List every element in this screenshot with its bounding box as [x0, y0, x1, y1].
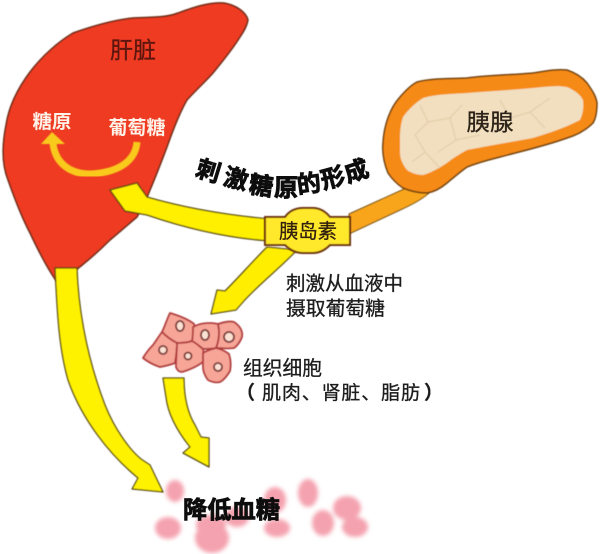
arrow: liver to lowered blood sugar	[55, 268, 163, 492]
tissue cells caption: 组织细胞	[243, 357, 322, 380]
insulin label box	[265, 208, 350, 253]
glycogen label: 糖原	[32, 110, 72, 133]
arrow: insulin to liver	[110, 183, 270, 241]
arrow: insulin to tissue cells	[211, 247, 297, 314]
curved caption: stimulate glycogen formation	[193, 155, 372, 202]
pancreas duct	[349, 186, 436, 234]
curved caption: stimulate glycogen formation: 刺	[193, 155, 224, 188]
caption: take up glucose from blood	[286, 273, 403, 320]
blood cells	[155, 479, 368, 553]
curved caption: stimulate glycogen formation: 糖	[247, 172, 275, 202]
glucose label: 葡萄糖	[108, 116, 166, 139]
result label: lower blood sugar: 降低血糖	[183, 497, 280, 524]
curved caption: stimulate glycogen formation: 形	[318, 163, 348, 195]
pancreas	[349, 70, 597, 234]
tissue cells caption: 肌肉、肾脏、脂肪	[262, 382, 420, 404]
caption: take up glucose from blood: 刺激从血液中	[286, 273, 403, 295]
tissue cells caption: （	[236, 382, 255, 404]
tissue cells	[143, 313, 242, 382]
insulin label: 胰岛素	[279, 220, 337, 243]
caption: take up glucose from blood: 摄取葡萄糖	[286, 298, 385, 320]
curved caption: stimulate glycogen formation: 激	[221, 164, 251, 196]
liver label: 肝脏	[110, 37, 156, 63]
curved caption: stimulate glycogen formation: 成	[341, 155, 372, 188]
curved caption: stimulate glycogen formation: 原	[274, 175, 298, 202]
pancreas texture	[412, 98, 550, 168]
arrow: tissue cells to lowered blood sugar	[163, 378, 209, 467]
liver	[3, 3, 248, 282]
tissue cells caption: ）	[424, 382, 443, 404]
pancreas label: 胰腺	[466, 109, 514, 135]
tissue cells caption	[236, 357, 443, 404]
arrow: glucose to glycogen	[41, 132, 137, 174]
curved caption: stimulate glycogen formation: 的	[295, 170, 323, 200]
